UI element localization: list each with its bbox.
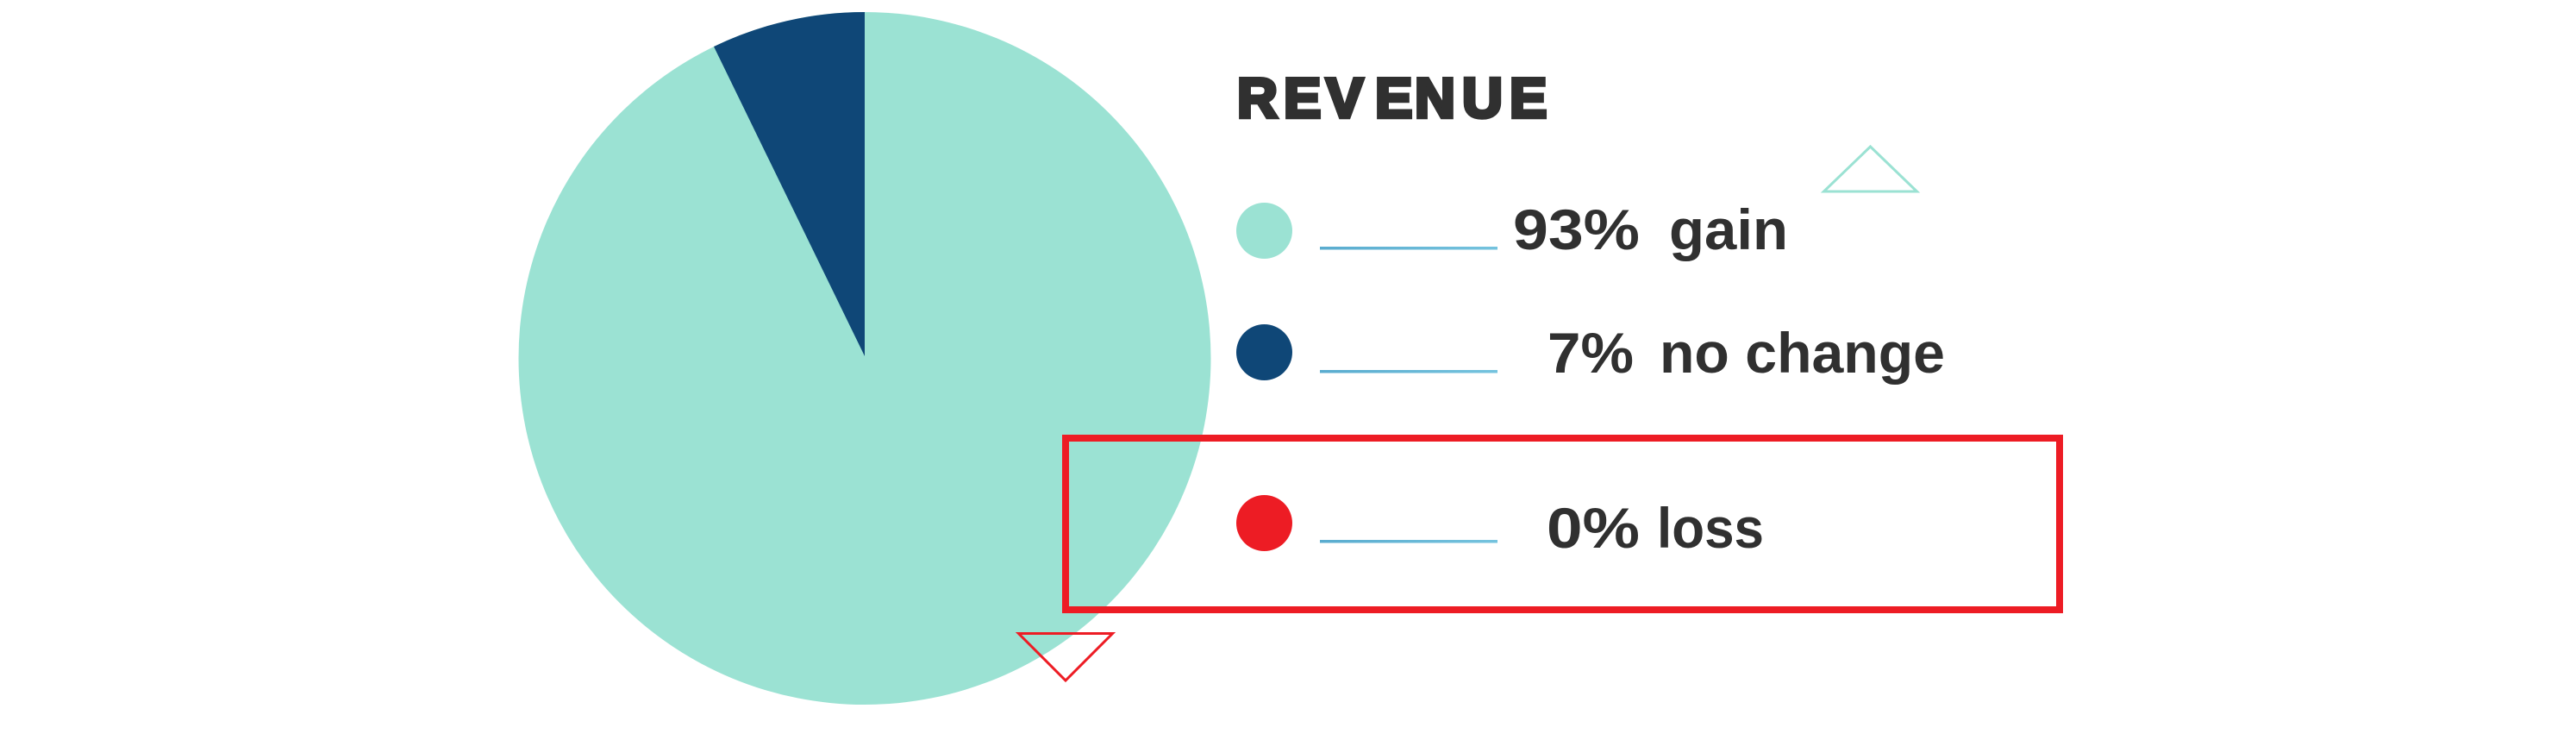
legend item: 93% gain: 93% — [1513, 198, 1640, 261]
icon: red down triangle — [1019, 633, 1112, 680]
legend item: 7% no change: no change — [1660, 321, 1945, 385]
legend item: 0% loss: 0% — [1547, 496, 1640, 560]
legend item: 7% no change — [1236, 321, 1945, 385]
legend item: 93% gain: gain — [1669, 198, 1788, 261]
legend item: 7% no change: 7% — [1547, 321, 1634, 385]
heading: revenue: REVENUE — [1237, 66, 1547, 129]
icon: teal up triangle — [1824, 147, 1917, 191]
legend item: 0% loss — [1236, 495, 1764, 560]
legend item: 93% gain — [1236, 198, 1788, 261]
highlight box: loss — [1066, 438, 2060, 610]
pie slice: 7% no change — [714, 12, 865, 356]
pie chart: revenue — [519, 12, 1210, 705]
legend item: 0% loss: loss — [1657, 496, 1764, 560]
